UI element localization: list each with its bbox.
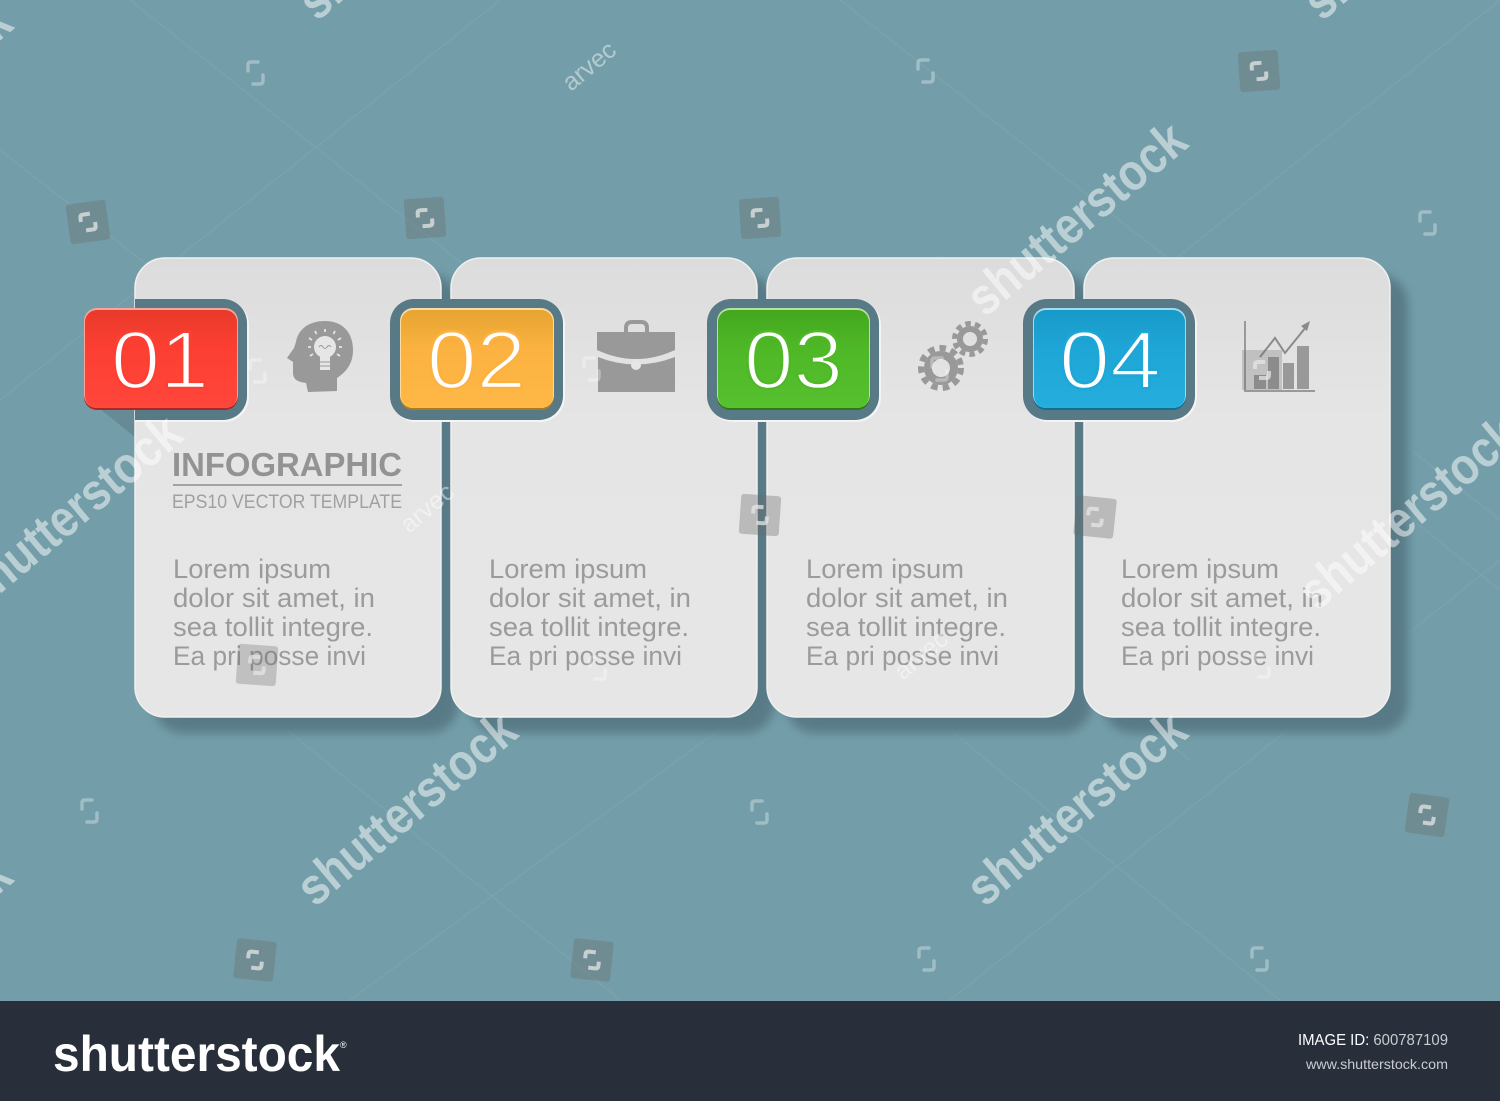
text block: card 2: sea tollit integre. — [489, 612, 689, 642]
text block: card 3: Ea pri posse invi — [806, 641, 999, 671]
text block: card 2: dolor sit amet, in — [489, 583, 691, 613]
text block: card 3: sea tollit integre. — [806, 612, 1006, 642]
footer registered mark: ® — [340, 1040, 347, 1050]
badge 01 — [84, 308, 238, 410]
text block: card 2: Lorem ipsum — [489, 554, 647, 584]
icon: bar chart with arrow — [1245, 321, 1315, 391]
text block: card 4: Lorem ipsum — [1121, 554, 1279, 584]
badge 01: 01 — [111, 315, 209, 406]
text block: card 4: sea tollit integre. — [1121, 612, 1321, 642]
badge 03 — [717, 308, 870, 410]
badge 04 — [1033, 308, 1186, 410]
text block: card 1: Ea pri posse invi — [173, 641, 366, 671]
text block: card 1: Lorem ipsum — [173, 554, 331, 584]
text block: card 1: dolor sit amet, in — [173, 583, 375, 613]
text block: card 1 — [173, 554, 375, 671]
text block: card 3 — [806, 554, 1008, 671]
image id: IMAGE ID: 600787109 — [1298, 1032, 1448, 1049]
text block: card 3: dolor sit amet, in — [806, 583, 1008, 613]
icon: head with light bulb — [287, 321, 353, 392]
text block: card 3: Lorem ipsum — [806, 554, 964, 584]
footer logo: shutterstock — [53, 1026, 340, 1082]
watermark: diagonal text: shutterstock — [955, 700, 1198, 917]
watermark: diagonal text: shutterstock — [285, 700, 528, 917]
badge 02 — [400, 308, 554, 410]
text block: card 1: sea tollit integre. — [173, 612, 373, 642]
panel: card 4 — [1084, 258, 1390, 717]
badge 04: 04 — [1059, 315, 1161, 406]
icon: briefcase — [597, 322, 675, 392]
panel: card 2 — [451, 258, 757, 717]
badge notches — [74, 299, 1197, 422]
subheading: EPS10 VECTOR TEMPLATE — [172, 492, 402, 513]
website: www.shutterstock.com — [1305, 1056, 1448, 1072]
watermark: arvec — [395, 36, 954, 686]
badge 01 long shadow — [100, 409, 136, 438]
watermark: arvec: arvec — [889, 625, 954, 686]
panel: card 3 — [767, 258, 1074, 717]
footer bar — [0, 1001, 1500, 1101]
badge 02: 02 — [427, 315, 526, 406]
text block: card 4 — [1121, 554, 1323, 671]
text block: card 2: Ea pri posse invi — [489, 641, 682, 671]
watermark: diagonal text: shutterstock — [955, 110, 1198, 327]
text block: card 4: dolor sit amet, in — [1121, 583, 1323, 613]
watermark: stock logo marks — [65, 50, 1450, 982]
card shadows — [153, 274, 1408, 733]
watermark: arvec: arvec — [557, 36, 622, 97]
panel: card 1 — [135, 258, 441, 717]
text block: card 2 — [489, 554, 691, 671]
text block: card 4: Ea pri posse invi — [1121, 641, 1314, 671]
watermark: arvec: arvec — [395, 478, 460, 539]
badge 03: 03 — [744, 315, 843, 406]
icon: gears — [921, 324, 986, 388]
heading: INFOGRAPHIC: INFOGRAPHIC — [172, 446, 402, 483]
